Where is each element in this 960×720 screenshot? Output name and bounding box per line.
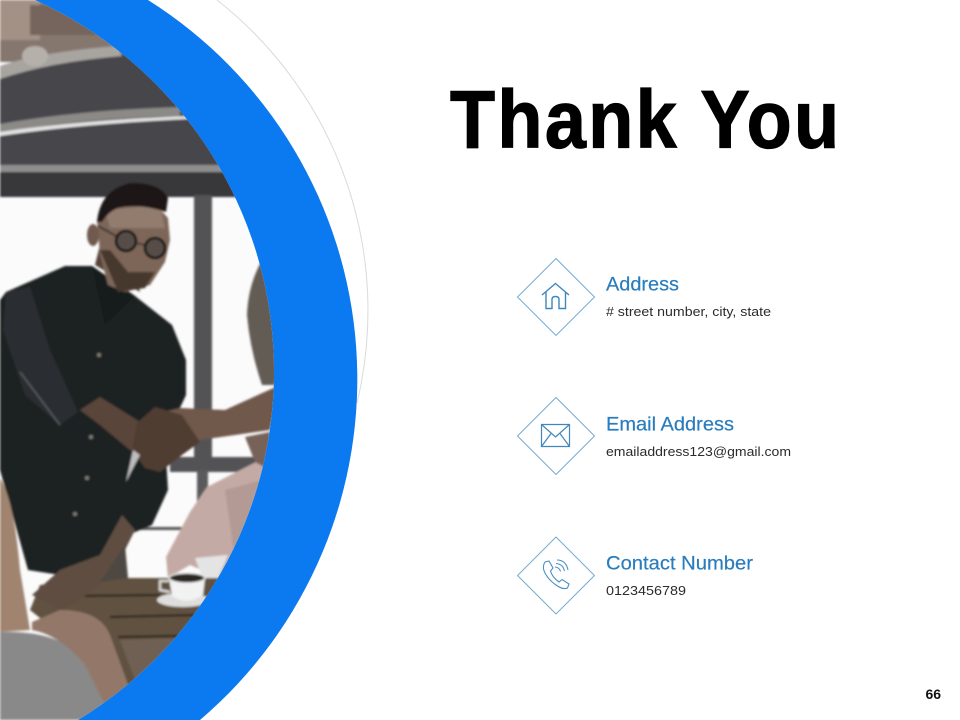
brick wall [0, 2, 114, 64]
man's lower arm and hand [32, 515, 135, 610]
arched canopy [0, 52, 218, 167]
address heading: Address [606, 274, 679, 296]
contact item: address [518, 258, 771, 336]
title: Thank You [450, 73, 841, 165]
contact item: email [518, 398, 791, 474]
clasped hands [132, 407, 200, 472]
phone heading: Contact Number [606, 552, 754, 574]
far person head [246, 262, 274, 387]
face [97, 198, 170, 292]
man's shirt [0, 266, 186, 575]
table [30, 578, 225, 690]
address diamond frame [518, 258, 594, 336]
email heading: Email Address [606, 414, 734, 436]
email details: emailaddress123@gmail.com [606, 445, 791, 459]
email diamond frame [518, 398, 594, 474]
woman's grey top [0, 632, 110, 720]
beam and window post [0, 165, 240, 172]
neck [95, 245, 140, 292]
pink jacket person [166, 460, 270, 580]
contact item: phone [518, 537, 754, 614]
blue ring [0, 0, 357, 720]
icon: house [542, 284, 569, 308]
glasses [116, 231, 165, 258]
address details: # street number, city, state [606, 305, 771, 319]
other arm [168, 386, 274, 440]
buttons [73, 353, 101, 516]
thin grey outer arc [217, 0, 368, 403]
photo: business handshake [0, 0, 300, 720]
woman's arm [32, 610, 130, 705]
icon: envelope [542, 424, 570, 446]
phone details: 0123456789 [606, 584, 686, 598]
hair [97, 183, 168, 222]
icon: phone handset [543, 560, 569, 589]
phone diamond frame [518, 537, 594, 614]
coffee cup and saucer [157, 593, 209, 607]
man's forearm [80, 396, 139, 452]
page number: 66 [926, 686, 941, 702]
woman's hair [0, 478, 30, 632]
